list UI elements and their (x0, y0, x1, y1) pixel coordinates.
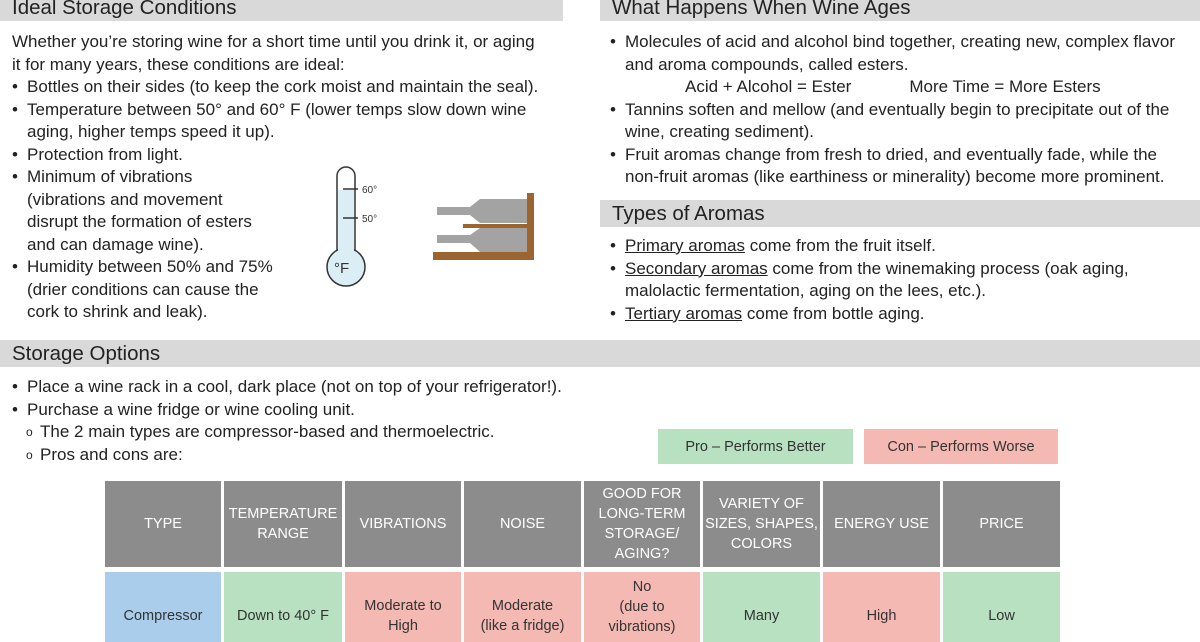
table: pros and cons: (like a fridge) (481, 618, 564, 634)
text: ideal storage: Whether you’re storing wine for a short time until you drink it, or aging (12, 32, 535, 51)
text: wine ages: non-fruit aromas (like earthiness or minerality) become more prominent. (625, 167, 1164, 186)
text: wine ages (610, 32, 1175, 186)
table: pros and cons: AGING? (615, 546, 669, 562)
text: ideal storage: Temperature between 50° and 60° F (lower temps slow down wine (27, 100, 526, 118)
table: pros and cons: VIBRATIONS (360, 516, 446, 532)
text: ideal storage: Minimum of vibrations (27, 167, 192, 186)
text: storage options: Pros and cons are: (40, 444, 183, 464)
text: ideal storage: Bottles on their sides (to keep the cork moist and maintain the seal). (27, 77, 538, 96)
icon: thermometer (326, 166, 377, 287)
legend: pro (658, 429, 853, 464)
table: pros and cons: Down to 40° F (237, 608, 329, 624)
table: pros and cons: Moderate to (364, 598, 442, 614)
text: ideal storage: disrupt the formation of esters (27, 212, 252, 231)
text: ideal storage: Protection from light. (27, 144, 183, 164)
table: pros and cons: NOISE (500, 516, 545, 532)
icon: thermometer: 50° (362, 214, 377, 225)
text: ideal storage: cork to shrink and leak). (27, 302, 207, 321)
heading: types of aromas (600, 200, 1200, 227)
text: aromas: Tertiary aromas come from bottle aging. (625, 304, 925, 322)
text: ideal storage: aging, higher temps speed it up). (27, 122, 275, 141)
text: aromas: malolactic fermentation, aging on the lees, etc.). (625, 281, 986, 300)
table: pros and cons: High (388, 618, 418, 634)
table: pros and cons: Low (988, 608, 1015, 624)
table: pros and cons: VARIETY OF (719, 496, 804, 512)
legend: con (864, 429, 1058, 464)
heading: wine ages (600, 0, 1200, 21)
icon: thermometer: 60° (362, 185, 377, 196)
text: aromas: Secondary aromas come from the winemaking process (oak aging, (625, 258, 1129, 278)
table: pros and cons: TYPE (144, 516, 182, 532)
table: pros and cons: Compressor (124, 608, 202, 624)
text: wine ages: Fruit aromas change from fresh to dried, and eventually fade, while the (625, 144, 1157, 164)
table: pros and cons: High (867, 608, 896, 624)
heading: storage options (0, 340, 1200, 367)
table: pros and cons: COLORS (731, 536, 792, 552)
text: wine ages: wine, creating sediment). (625, 122, 814, 141)
table: pros and cons: LONG-TERM (598, 506, 686, 522)
text: ideal storage: it for many years, these conditions are ideal: (12, 54, 345, 74)
text: ideal storage: (drier conditions can cause the (27, 280, 259, 298)
text: wine ages: Molecules of acid and alcohol bind together, creating new, complex flavor (625, 32, 1175, 51)
icon: thermometer: °F (334, 260, 349, 277)
table: pros and cons: RANGE (257, 526, 309, 542)
heading: ideal storage (0, 0, 563, 21)
text: ideal storage: (vibrations and movement (27, 190, 223, 208)
table: pros and cons: GOOD FOR (603, 486, 681, 502)
table: pros and cons: (due to (619, 599, 665, 615)
table: pros and cons: TEMPERATURE (229, 506, 337, 522)
text: wine ages: Tannins soften and mellow (and eventually begin to precipitate out of the (625, 100, 1169, 118)
table: pros and cons: vibrations) (609, 619, 675, 635)
table: pros and cons: STORAGE/ (605, 526, 679, 542)
text: aromas: Primary aromas come from the fruit itself. (625, 236, 936, 255)
text: storage options: Place a wine rack in a cool, dark place (not on top of your refrigerator!). (27, 377, 562, 396)
text: wine ages: and aroma compounds, called esters. (625, 54, 908, 74)
heading: types of aromas: Types of Aromas (612, 202, 765, 225)
heading: storage options: Storage Options (12, 342, 160, 365)
text: storage options: The 2 main types are compressor-based and thermoelectric. (40, 422, 494, 441)
table: pros and cons: SIZES, SHAPES, (705, 516, 818, 532)
table: pros and cons: No (633, 579, 651, 595)
table: pros and cons: Many (744, 608, 779, 624)
table: pros and cons: Moderate (492, 598, 553, 614)
text: ideal storage (12, 32, 538, 321)
table: pros and cons: PRICE (979, 516, 1024, 532)
legend: pro: Pro – Performs Better (685, 438, 826, 454)
table: pros and cons (105, 481, 1060, 642)
text: aromas (610, 236, 1129, 322)
text: storage options: Purchase a wine fridge or wine cooling unit. (27, 400, 355, 418)
table: pros and cons: ENERGY USE (834, 516, 929, 532)
text: wine ages: Acid + Alcohol = Ester More Time = More Esters (685, 77, 1101, 96)
text: ideal storage: and can damage wine). (27, 234, 204, 254)
text: ideal storage: Humidity between 50% and 75% (27, 257, 273, 276)
text: storage options (12, 377, 562, 464)
legend: con: Con – Performs Worse (887, 438, 1035, 454)
icon: bottles on rack (433, 193, 534, 260)
